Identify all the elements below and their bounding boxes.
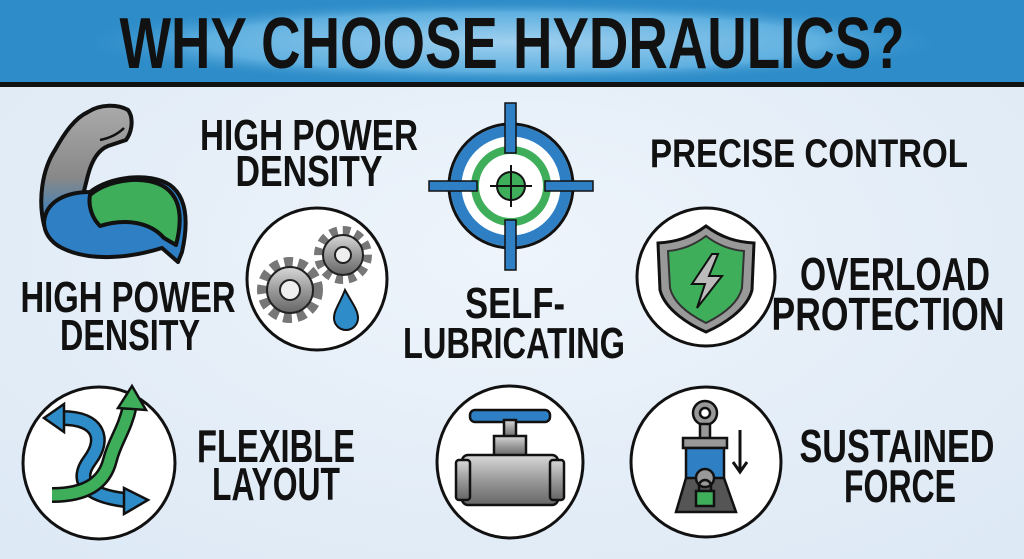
- text: high power density (top): DENSITY: [236, 147, 382, 196]
- text: high power density (left): DENSITY: [60, 311, 200, 360]
- text: sustained force: [800, 420, 994, 512]
- icon: target: [429, 103, 593, 270]
- text: high power density (left): HIGH POWER: [20, 273, 236, 322]
- text: high power density (top): HIGH POWER: [200, 111, 418, 160]
- text: self-lubricating: SELF-: [465, 279, 565, 328]
- icon: shield: [637, 208, 775, 346]
- text: precise control: PRECISE CONTROL: [650, 132, 968, 176]
- text: high power density (left): [20, 273, 236, 360]
- text: flexible layout: FLEXIBLE: [197, 420, 355, 472]
- text: self-lubricating: LUBRICATING: [403, 319, 625, 368]
- text: sustained force: FORCE: [844, 460, 956, 512]
- icon: flexed arm: [41, 106, 186, 262]
- text: flexible layout: LAYOUT: [212, 458, 340, 510]
- icon: gears and drop: [247, 208, 387, 350]
- text: flexible layout: [197, 420, 355, 510]
- header band: [0, 0, 1024, 87]
- icon: valve: [437, 386, 583, 538]
- text: high power density (top): [200, 111, 418, 196]
- icon: flexible arrows: [23, 386, 175, 539]
- icon: cylinder with lock: [631, 387, 781, 537]
- text: self-lubricating: [403, 279, 625, 368]
- text: overload protection: [772, 248, 1004, 340]
